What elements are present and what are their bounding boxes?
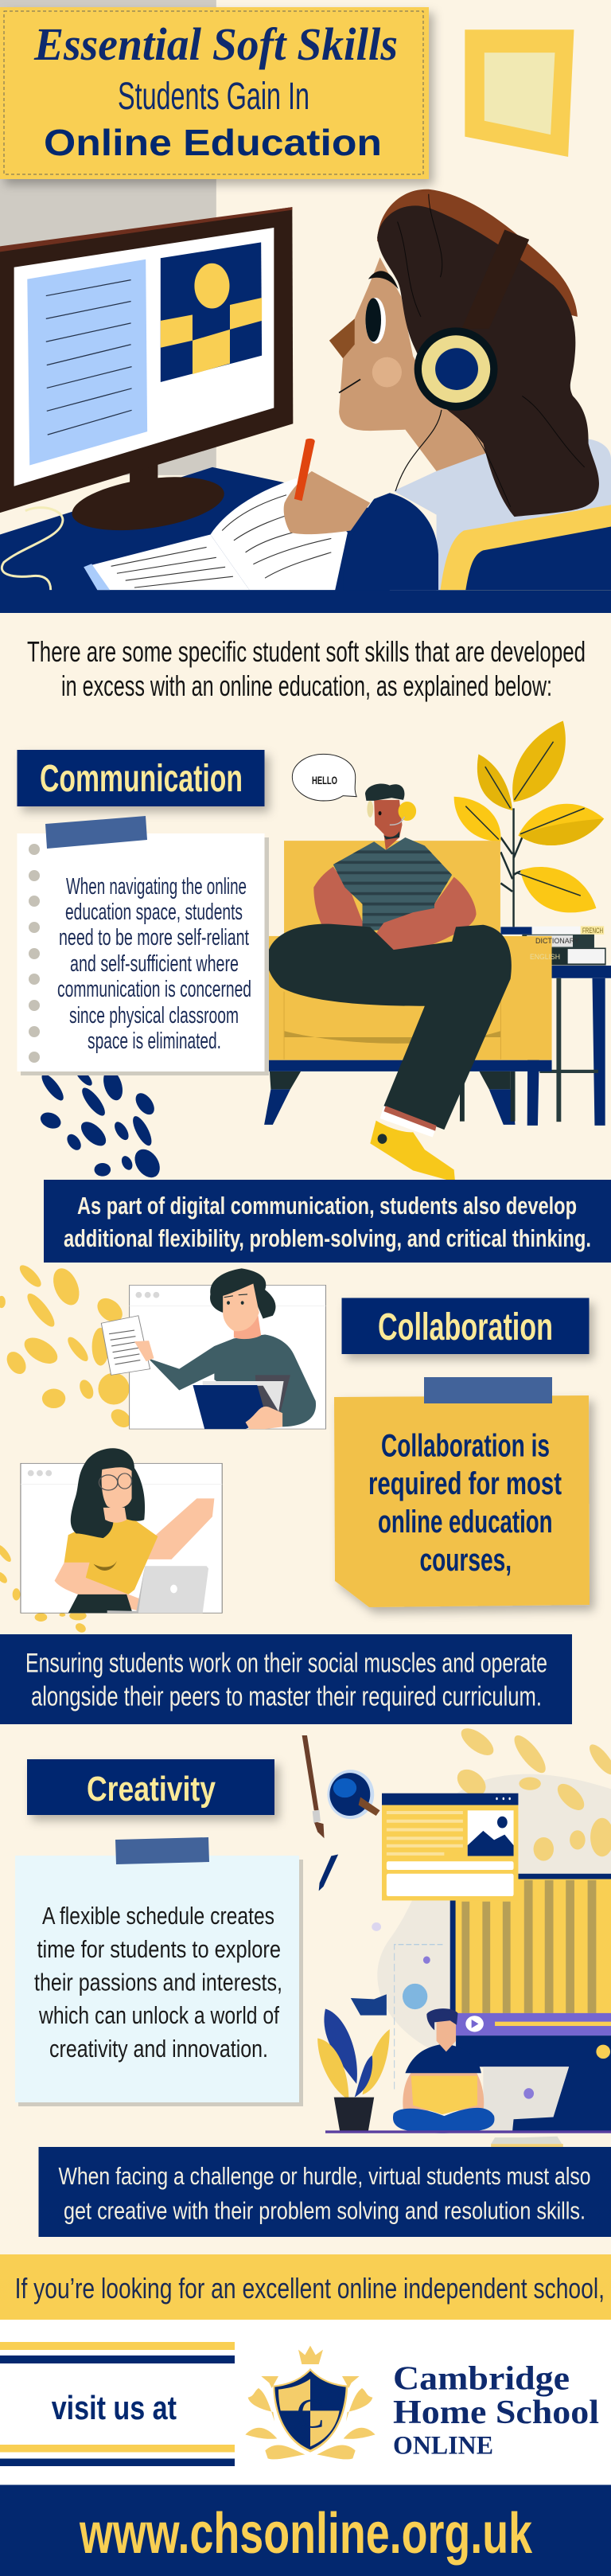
heading: Creativity [27, 1759, 274, 1815]
panel: creativity note: their passions and interests, [34, 1969, 282, 1996]
school crest logo: C [297, 2391, 325, 2437]
seated person with laptop [393, 2008, 494, 2133]
school name: Home School [393, 2395, 599, 2431]
icon: open notebook and hand [84, 439, 370, 590]
school name [393, 2361, 599, 2460]
banner: problem solving [38, 2147, 611, 2237]
speech bubble text: HELLO [312, 774, 337, 786]
title panel [0, 7, 429, 179]
panel: communication note: need to be more self-reliant [59, 925, 249, 950]
panel: communication note: education space, students [65, 900, 243, 925]
man figure [267, 784, 512, 1182]
heading: Collaboration [342, 1298, 589, 1354]
illustration: student at computer [0, 0, 611, 613]
title line: bold: Online Education [44, 122, 382, 163]
visit text: visit us at [52, 2389, 177, 2426]
banner: call to action [0, 2254, 611, 2320]
decorative yellow blobs [0, 1263, 134, 1634]
banner: digital communication [44, 1180, 611, 1263]
panel: creativity note: creativity and innovation. [49, 2035, 268, 2063]
intro text [27, 635, 586, 702]
panel: creativity note: time for students to explore [37, 1935, 281, 1963]
banner: social muscles [0, 1634, 572, 1724]
icon: cable [2, 508, 63, 590]
title line: middle: Students Gain In [118, 76, 309, 118]
book labels: DICTIONARY [535, 937, 579, 945]
panel: collaboration note: courses, [420, 1543, 512, 1578]
icon: folder [351, 1994, 387, 2016]
illustration: man on sofa with headset [264, 721, 611, 1182]
illustration: woman in video window [21, 1448, 222, 1613]
illustration: creative workspace [302, 1723, 611, 2147]
panel: communication note: since physical classroom [69, 1003, 239, 1028]
footer: website [0, 2485, 611, 2576]
panel: communication note [18, 816, 269, 1075]
paint brush and pot [302, 1735, 380, 1891]
panel: collaboration note [334, 1377, 590, 1607]
browser card [382, 1793, 518, 1900]
title line: script: Essential Soft Skills [33, 18, 398, 70]
panel: school contact [0, 2320, 611, 2485]
soft gray backdrop [377, 1774, 611, 2057]
icon: wall picture frame [465, 29, 574, 157]
muted yellow blobs [454, 1723, 611, 1861]
illustration: man in video window [101, 1268, 325, 1429]
decorative navy blobs [38, 1065, 165, 1183]
desk [0, 467, 611, 613]
heading: Communication: Communication [40, 758, 243, 800]
panel: communication note: space is eliminated. [88, 1028, 221, 1054]
plant [454, 721, 604, 927]
student figure [329, 189, 611, 590]
panel: communication note: communication is concerned [57, 977, 251, 1002]
book labels: ENGLISH [530, 953, 560, 961]
panel: communication note: When navigating the online [66, 874, 247, 900]
icon: yellow chair [440, 505, 611, 590]
icon: computer monitor [0, 207, 293, 539]
school crest logo [245, 2346, 376, 2459]
heading: Creativity: Creativity [87, 1770, 216, 1809]
heading: Communication [18, 750, 264, 806]
side table with books [500, 926, 611, 1126]
school name: ONLINE [393, 2431, 493, 2460]
speech bubble [292, 754, 356, 801]
potted plant [317, 2008, 390, 2131]
navy sleeve [343, 493, 438, 590]
sofa [264, 841, 552, 1125]
striped video screen [450, 1874, 611, 2131]
book labels [530, 927, 603, 961]
panel: communication note: and self-sufficient where [70, 951, 239, 977]
school name: Cambridge [393, 2361, 570, 2398]
panel: creativity note [15, 1837, 303, 2106]
icon: check bubble [403, 1984, 427, 2009]
panel: creativity note: A flexible schedule creates [42, 1902, 274, 1930]
panel: creativity note: which can unlock a world of [38, 2001, 279, 2029]
